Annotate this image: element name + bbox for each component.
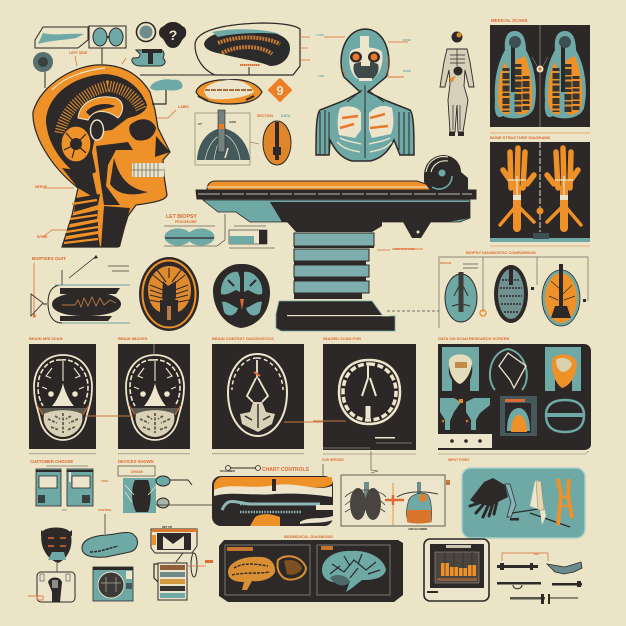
rib cage with probes: DEVICES SHOWN — [118, 459, 154, 464]
skeleton torso: TISS — [318, 74, 324, 78]
teal brain on stem — [150, 79, 183, 104]
capsule pills with caption — [164, 214, 225, 246]
small full body skeleton — [440, 32, 474, 136]
surgical tools: KEY — [534, 552, 540, 556]
panel: brain scan 4: IMAGED SCAN FOR — [323, 336, 361, 341]
monitor bar chart — [424, 539, 489, 601]
panel: brain scan 3 — [212, 336, 330, 454]
skeleton torso: BONE — [403, 38, 411, 42]
orange number tag — [269, 79, 291, 101]
speckled disc with leader — [33, 48, 102, 88]
framed spine scan: CT — [198, 122, 202, 126]
dark question badge: ? — [169, 27, 177, 43]
framed spine scan: AXIS — [229, 120, 236, 124]
small patient head scan — [41, 528, 72, 572]
imaging cross-section capsule: CHART CONTROLS — [262, 467, 310, 473]
cabinet units: CUSTOMER CHOOSE — [30, 459, 73, 464]
surgical tools — [497, 552, 582, 604]
small grid device — [229, 226, 275, 248]
framed chest diagrams: AND SCANNER — [408, 527, 427, 531]
ultrasound probe diagram: BIOPSIES GUIT — [32, 256, 66, 261]
capsule pills with caption: LET BIOPSY — [166, 214, 197, 220]
large brain in capsule — [140, 23, 310, 75]
teal kidney shape — [82, 533, 137, 557]
orange organ with label: SECTION — [257, 114, 273, 118]
gradient brain panel — [219, 534, 403, 602]
orange organ with label: DATA — [281, 114, 291, 118]
rib cage with probes: ORGAN — [131, 470, 144, 474]
framed chest diagrams: INPUT POINT — [448, 458, 470, 462]
panel: hand scans: BONE STRUCTURE DIAGRAMS — [490, 135, 551, 140]
operating table — [196, 155, 476, 331]
panel: brain scan 3: BRAIN CONTEXT DIAGNOSTICS — [212, 336, 274, 341]
panel: three organ scans: ORGAN — [440, 261, 451, 265]
imaging cross-section capsule: SCANNER — [220, 469, 236, 473]
panel: lung scans — [490, 18, 590, 127]
oval organ section — [196, 80, 262, 104]
panel: brain scan 1: BRAIN MRI SCAN — [29, 336, 63, 341]
skeleton torso — [316, 29, 414, 161]
round scan icon — [136, 22, 156, 42]
small device icon — [132, 49, 165, 66]
dark question badge — [159, 22, 186, 48]
rib cage with probes: VITAL — [101, 479, 109, 483]
imaging cross-section capsule — [212, 466, 333, 526]
panel: three organ scans: BIOPSY DIAGNOSTIC COMPARISON — [466, 250, 536, 255]
ultrasound probe diagram — [31, 255, 130, 323]
scanner monitor stack — [151, 525, 197, 562]
teal scanner box — [93, 567, 133, 601]
panel: brain scan 4 — [313, 336, 416, 473]
scanner monitor stack: SET UP — [162, 525, 172, 529]
label: upper head labels: NERVE — [35, 185, 48, 189]
head and skull cross-section — [33, 65, 170, 247]
framed chest diagrams: OUR SPECIES — [322, 458, 344, 462]
label: upper head labels: LEFT SIDE — [69, 51, 88, 55]
orange brain scan disc — [139, 257, 199, 331]
panel: brain scan 2 — [86, 336, 190, 454]
panel: three organ scans — [387, 246, 590, 328]
rib cage with probes: CONTROL — [98, 508, 112, 512]
label: upper head labels: LABEL — [178, 105, 191, 109]
teal brain scan — [213, 264, 270, 328]
panel: lung scans: MEDICAL SCANS — [491, 18, 528, 23]
teal instrument panel — [462, 468, 585, 538]
panel: hand scans — [490, 133, 590, 242]
capsule pills with caption: PROCEDURE — [175, 220, 197, 224]
orange number tag: 9 — [276, 83, 284, 98]
label: upper head labels — [35, 51, 191, 239]
orange organ with label — [257, 114, 291, 165]
panel: dark multi-scan console — [438, 336, 591, 454]
cabinet units — [30, 459, 93, 510]
gradient brain panel: BIOMEDICAL DIAGNOSIS — [284, 534, 333, 539]
panel: brain scan 2: BRAIN IMAGES — [118, 336, 148, 341]
colour shelf rack — [154, 553, 213, 600]
rib cage with probes — [98, 459, 212, 534]
panel: dark multi-scan console: DATA ON SCAN RESEARCH SCREEN — [438, 336, 509, 341]
panel: brain scan 1 — [29, 336, 96, 454]
framed spine scan — [195, 110, 259, 165]
skeleton torso: LUNG — [316, 33, 324, 37]
operating table: HEIGHT RANGE — [392, 247, 415, 251]
x-ray tablet icon — [28, 572, 75, 602]
skeleton torso: NODE — [403, 69, 411, 73]
label: upper head labels: SPINE — [37, 235, 48, 239]
framed chest diagrams — [322, 458, 470, 531]
top-left teal organ callout box — [35, 26, 126, 48]
